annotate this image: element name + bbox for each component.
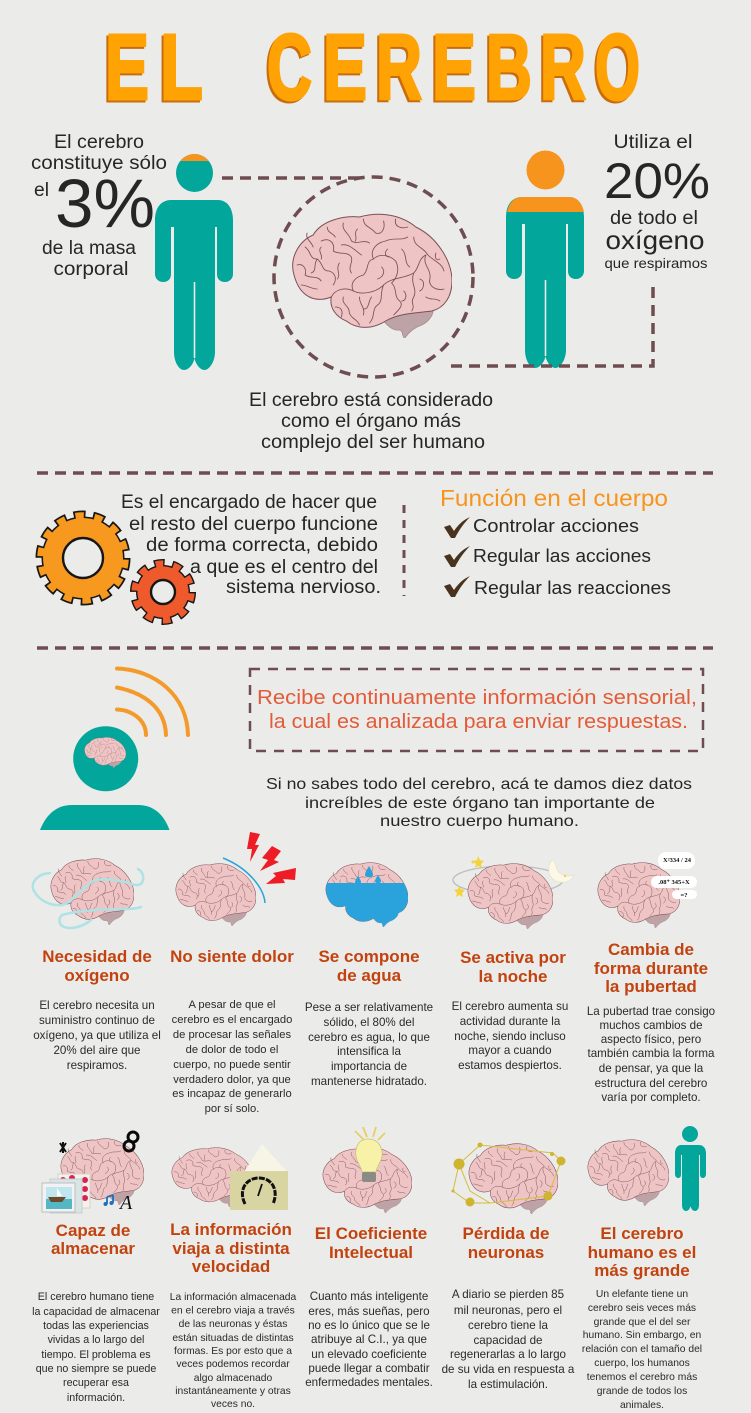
description: El cerebro humano tiene — [38, 1291, 154, 1303]
icon: main brain — [293, 214, 452, 338]
description: de dolor de todo el — [186, 1044, 278, 1056]
text: 3% of body mass: El cerebro — [54, 132, 144, 153]
title: E — [430, 17, 474, 121]
text: most complex organ: El cerebro está considerado — [249, 390, 493, 411]
callout: sensory information: Recibe continuamente información sensorial, — [257, 687, 697, 709]
description: veces no. — [211, 1399, 255, 1410]
title: B — [484, 17, 530, 121]
heading: neuronas — [468, 1243, 544, 1262]
title: O — [593, 17, 638, 121]
heading: la noche — [479, 967, 547, 986]
heading — [588, 1224, 696, 1280]
heading: velocidad — [192, 1257, 270, 1276]
title: E — [105, 15, 149, 119]
panel: no siente dolor — [170, 832, 296, 1115]
description: de pensar, ya que la — [599, 1062, 704, 1075]
heading: más grande — [594, 1261, 690, 1280]
heading: function in the body: Función en el cuerpo — [440, 485, 668, 511]
description: es incapaz de generarlo — [172, 1088, 292, 1100]
description: todas las experiencias — [43, 1320, 149, 1332]
heading: humano es el — [588, 1243, 696, 1262]
description: aspecto físico, pero — [601, 1033, 701, 1046]
description — [452, 1000, 568, 1072]
heading: La información — [170, 1220, 292, 1239]
heading: El cerebro — [600, 1224, 684, 1243]
description: están situadas de distintas — [172, 1333, 294, 1344]
icon: brain with formula bubbles: =? — [681, 892, 687, 899]
figure: right person with orange shoulders — [506, 150, 584, 368]
connector: left figure to brain — [222, 176, 362, 180]
description: grande de todos los — [597, 1386, 687, 1397]
description: estructura del cerebro — [595, 1077, 707, 1090]
description — [442, 1288, 575, 1391]
description — [305, 1001, 433, 1088]
dashed circle around brain — [274, 177, 473, 377]
figure: left person with orange brain cap — [155, 154, 233, 370]
description: cerebro es el encargado — [172, 1014, 292, 1026]
panel: la información viaja — [170, 1144, 297, 1410]
description: cuerpo, no puede sentir — [173, 1059, 291, 1071]
list: functions: Regular las reacciones — [474, 577, 671, 598]
description: mil neuronas, pero el — [454, 1304, 562, 1317]
icon: brain with speedometer — [172, 1144, 288, 1210]
description: formas. Es por esto que a — [174, 1346, 292, 1357]
description: instantáneamente y otras — [175, 1386, 291, 1397]
description: que no siempre se puede — [36, 1363, 156, 1375]
title — [103, 15, 640, 121]
callout: sensory information — [250, 669, 703, 751]
text: central nervous system: el resto del cuerpo funcione — [129, 514, 378, 535]
description: eres, más sueñas, pero — [308, 1305, 430, 1318]
description — [32, 1291, 160, 1404]
description: atribuye al C.I., ya que — [311, 1333, 427, 1346]
description: mayor a cuando — [468, 1044, 552, 1057]
title: E — [432, 15, 476, 119]
list: functions: Regular las acciones — [473, 545, 651, 566]
description: regenerarlas a lo largo — [450, 1348, 566, 1361]
text: 20% of oxygen — [604, 132, 710, 271]
icon: signal waves — [117, 668, 188, 735]
heading: Necesidad de — [42, 947, 152, 966]
description: A diario se pierden 85 — [452, 1288, 564, 1301]
icon: brain with water — [326, 863, 408, 927]
text: 3% of body mass: de la masa — [42, 238, 136, 259]
title: L — [158, 17, 201, 121]
text: central nervous system: sistema nervioso. — [226, 577, 381, 598]
panel: cerebro humano más grande — [582, 1126, 706, 1411]
title: C — [267, 15, 312, 119]
description — [33, 999, 161, 1072]
check 3 — [444, 576, 470, 597]
description: enfermedades mentales. — [305, 1376, 433, 1389]
heading: almacenar — [51, 1239, 135, 1258]
description: 20% del aire que — [53, 1044, 141, 1057]
panel: se activa por la noche — [452, 856, 574, 1072]
description: un elevado coeficiente — [311, 1348, 427, 1361]
title: E — [323, 15, 367, 119]
icon: brain with formula bubbles: .08⁺ 345+X — [658, 879, 690, 886]
panel: capaz de almacenar — [32, 1132, 160, 1404]
description: tiempo. El problema es — [41, 1349, 151, 1361]
text: introduction: increíbles de este órgano tan importante de — [305, 795, 655, 812]
text: 3% of body mass: 3% — [55, 165, 155, 242]
title: R — [374, 17, 420, 121]
heading: Pérdida de — [463, 1224, 549, 1243]
heading: la pubertad — [605, 977, 697, 996]
title: O — [595, 15, 640, 119]
description: vividas a lo largo del — [48, 1334, 144, 1346]
heading: Intelectual — [329, 1243, 413, 1262]
text: most complex organ: como el órgano más — [281, 411, 461, 432]
description: relación con el tamaño del — [582, 1344, 702, 1355]
heading — [460, 948, 566, 986]
text: most complex organ: complejo del ser humano — [261, 432, 485, 453]
icon: large orange gear — [40, 514, 126, 602]
title: B — [486, 15, 532, 119]
check 2 — [444, 546, 470, 567]
description: en el cerebro viaja a través — [171, 1306, 295, 1316]
icon: brain with memories: A — [118, 1192, 133, 1214]
description: muchos cambios de — [599, 1019, 703, 1032]
title: E — [103, 17, 147, 121]
icon: brain next to person — [588, 1126, 706, 1211]
heading: oxígeno — [64, 966, 130, 985]
text: 3% of body mass — [31, 132, 167, 280]
description: respiramos. — [67, 1059, 127, 1072]
icon: brain with neurons — [452, 1142, 566, 1214]
title: R — [538, 17, 584, 121]
icon: brain with memories — [42, 1132, 144, 1214]
heading — [318, 947, 420, 985]
panel: necesidad de oxígeno — [33, 859, 161, 1072]
description: información. — [67, 1392, 125, 1404]
icon: brain with air — [33, 859, 143, 928]
description: estamos despiertos. — [458, 1059, 562, 1072]
heading: Cambia de — [608, 940, 694, 959]
list: functions: Controlar acciones — [473, 515, 639, 536]
heading — [315, 1224, 427, 1262]
list: functions — [444, 515, 671, 598]
title: E — [321, 17, 365, 121]
description: recuperar esa — [63, 1377, 129, 1389]
callout: sensory information: la cual es analizada para enviar respuestas. — [269, 711, 688, 733]
text: 20% of oxygen: que respiramos — [604, 255, 708, 271]
description: La pubertad trae consigo — [587, 1005, 715, 1018]
text: central nervous system: Es el encargado de hacer que — [121, 492, 377, 513]
text: 3% of body mass: corporal — [54, 259, 128, 280]
vertical divider — [402, 505, 406, 596]
description: suministro continuo de — [39, 1014, 155, 1027]
description: cerebro seis veces más — [588, 1303, 696, 1314]
panel: coeficiente intelectual — [305, 1127, 433, 1389]
divider — [37, 471, 713, 475]
description: A pesar de que el — [188, 999, 276, 1011]
text: introduction — [266, 776, 692, 830]
panel: cambia de forma durante la pubertad — [587, 852, 715, 1104]
heading — [51, 1221, 135, 1258]
description: verdadero dolor, ya que — [173, 1074, 291, 1086]
description — [305, 1290, 433, 1389]
text: central nervous system: de forma correcta, debido — [146, 535, 378, 556]
description: mantenerse hidratado. — [311, 1075, 427, 1088]
description: tenemos el cerebro más — [587, 1372, 697, 1383]
description: la capacidad de almacenar — [32, 1306, 160, 1318]
description: Cuanto más inteligente — [310, 1290, 428, 1303]
heading: El Coeficiente — [315, 1224, 427, 1243]
description: sólido, el 80% del — [324, 1016, 414, 1029]
panel: pérdida de neuronas — [442, 1142, 575, 1391]
icon: brain with formula bubbles — [598, 852, 697, 928]
heading — [42, 947, 152, 985]
heading: de agua — [337, 966, 402, 985]
description — [172, 999, 292, 1115]
icon: small red gear — [134, 563, 192, 621]
description: de procesar las señales — [173, 1029, 291, 1041]
description: por sí solo. — [205, 1103, 259, 1115]
connector: right figure to brain — [451, 280, 653, 366]
text: 20% of oxygen: 20% — [604, 153, 710, 209]
heading — [170, 1220, 292, 1276]
description: la estimulación. — [468, 1378, 548, 1391]
text: 3% of body mass: el — [34, 180, 49, 201]
heading: No siente dolor — [170, 947, 294, 966]
description: La información almacenada — [170, 1292, 297, 1303]
heading: Se compone — [318, 947, 420, 966]
description — [170, 1292, 297, 1410]
text: 20% of oxygen: Utiliza el — [614, 132, 692, 153]
description: de las neuronas y éstas — [179, 1319, 287, 1330]
description: puede llegar a combatir — [308, 1362, 430, 1375]
icon: person with brain — [40, 726, 170, 830]
title: C — [265, 17, 310, 121]
heading: Se activa por — [460, 948, 566, 967]
description: también cambia la forma — [588, 1047, 715, 1060]
text: 20% of oxygen: oxígeno — [606, 225, 704, 255]
text: 3% of body mass: constituye sólo — [31, 153, 167, 174]
description: actividad durante la — [460, 1015, 561, 1028]
check 1 — [444, 517, 470, 538]
description: noche, siendo incluso — [454, 1030, 566, 1043]
description: Pese a ser relativamente — [305, 1001, 433, 1014]
text: introduction: Si no sabes todo del cerebro, acá te damos diez datos — [266, 776, 692, 793]
title: L — [160, 15, 203, 119]
description: de su vida en respuesta a — [442, 1363, 575, 1376]
description: humano. Sin embargo, en — [583, 1330, 702, 1341]
icon: brain with lightning — [176, 832, 296, 926]
heading: Capaz de — [56, 1221, 130, 1240]
description: El cerebro aumenta su — [452, 1000, 568, 1013]
description: El cerebro necesita un — [39, 999, 155, 1012]
description: Un elefante tiene un — [596, 1289, 688, 1300]
description: grande que el del ser — [594, 1317, 691, 1328]
description: intensifica la — [337, 1045, 401, 1058]
text: central nervous system: a que es el centro del — [190, 557, 378, 578]
icon: brain with formula bubbles: X²334 / 24 — [663, 857, 692, 864]
heading: viaja a distinta — [172, 1239, 290, 1258]
panel: se compone de agua — [305, 863, 433, 1088]
description: importancia de — [331, 1060, 407, 1073]
text: most complex organ — [249, 390, 493, 453]
description — [587, 1005, 715, 1104]
icon: brain with moon and stars — [453, 856, 574, 929]
description — [582, 1289, 702, 1411]
title: R — [376, 15, 422, 119]
description: cerebro tiene la — [468, 1319, 549, 1332]
heading — [594, 940, 708, 996]
description: cuerpo, los humanos — [594, 1358, 690, 1369]
heading: forma durante — [594, 959, 708, 978]
description: oxígeno, ya que utiliza el — [33, 1029, 161, 1042]
text: introduction: nuestro cuerpo humano. — [380, 813, 579, 830]
text: central nervous system — [121, 492, 381, 598]
description: animales. — [620, 1400, 664, 1411]
text: 20% of oxygen: de todo el — [610, 208, 698, 229]
description: veces podemos recordar — [176, 1359, 290, 1370]
description: varía por completo. — [601, 1091, 701, 1104]
description: no es lo único que se le — [308, 1319, 430, 1332]
divider — [37, 646, 713, 650]
description: algo almacenado — [194, 1373, 272, 1384]
icon: brain with lightbulb — [323, 1127, 412, 1213]
description: cerebro es agua, lo que — [308, 1031, 430, 1044]
description: capacidad de — [474, 1334, 542, 1347]
title: R — [540, 15, 586, 119]
heading — [463, 1224, 549, 1262]
